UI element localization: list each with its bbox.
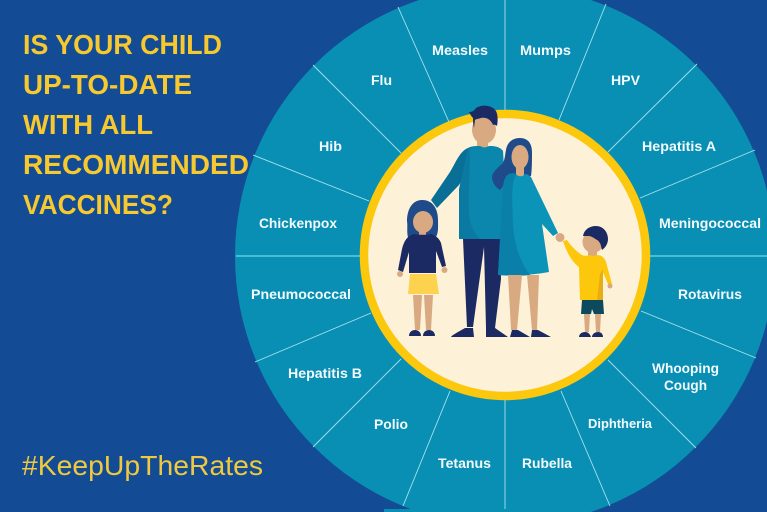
label: Hib: Hib [319, 138, 342, 154]
label: Polio: Polio [374, 416, 408, 432]
label: Whooping Cough [652, 360, 719, 393]
label: Mumps: Mumps [520, 42, 571, 58]
vaccine wheel [235, 0, 767, 512]
title: RECOMMENDED [23, 149, 249, 180]
label: Meningococcal: Meningococcal [659, 215, 761, 231]
label: Whooping Cough: Cough [664, 377, 707, 393]
title: IS YOUR CHILD [23, 29, 222, 60]
label: Hepatitis A: Hepatitis A [642, 138, 716, 154]
label: Measles: Measles [432, 42, 488, 58]
family illustration [397, 106, 612, 337]
title: WITH ALL [23, 109, 153, 140]
bottom edge strip [384, 509, 574, 512]
label: Chickenpox: Chickenpox [259, 215, 337, 231]
figure: daughter [397, 200, 448, 336]
label: Tetanus: Tetanus [438, 455, 491, 471]
label: Diphtheria: Diphtheria [588, 416, 653, 431]
figure: son [563, 226, 612, 337]
label: Rubella: Rubella [522, 455, 572, 471]
label: Flu: Flu [371, 72, 392, 88]
label: Whooping Cough: Whooping [652, 360, 719, 376]
wheel disc [235, 0, 767, 512]
label: HPV: HPV [611, 72, 641, 88]
figure: father [431, 106, 508, 337]
centre medallion with yellow ring [364, 114, 646, 396]
label: Pneumococcal: Pneumococcal [251, 286, 351, 302]
hashtag: #KeepUpTheRates [22, 450, 263, 481]
label: Hepatitis B: Hepatitis B [288, 365, 362, 381]
title: VACCINES? [23, 189, 173, 220]
label: Rotavirus: Rotavirus [678, 286, 742, 302]
figure: mother [492, 138, 564, 337]
title: UP-TO-DATE [23, 69, 192, 100]
title [23, 29, 249, 220]
